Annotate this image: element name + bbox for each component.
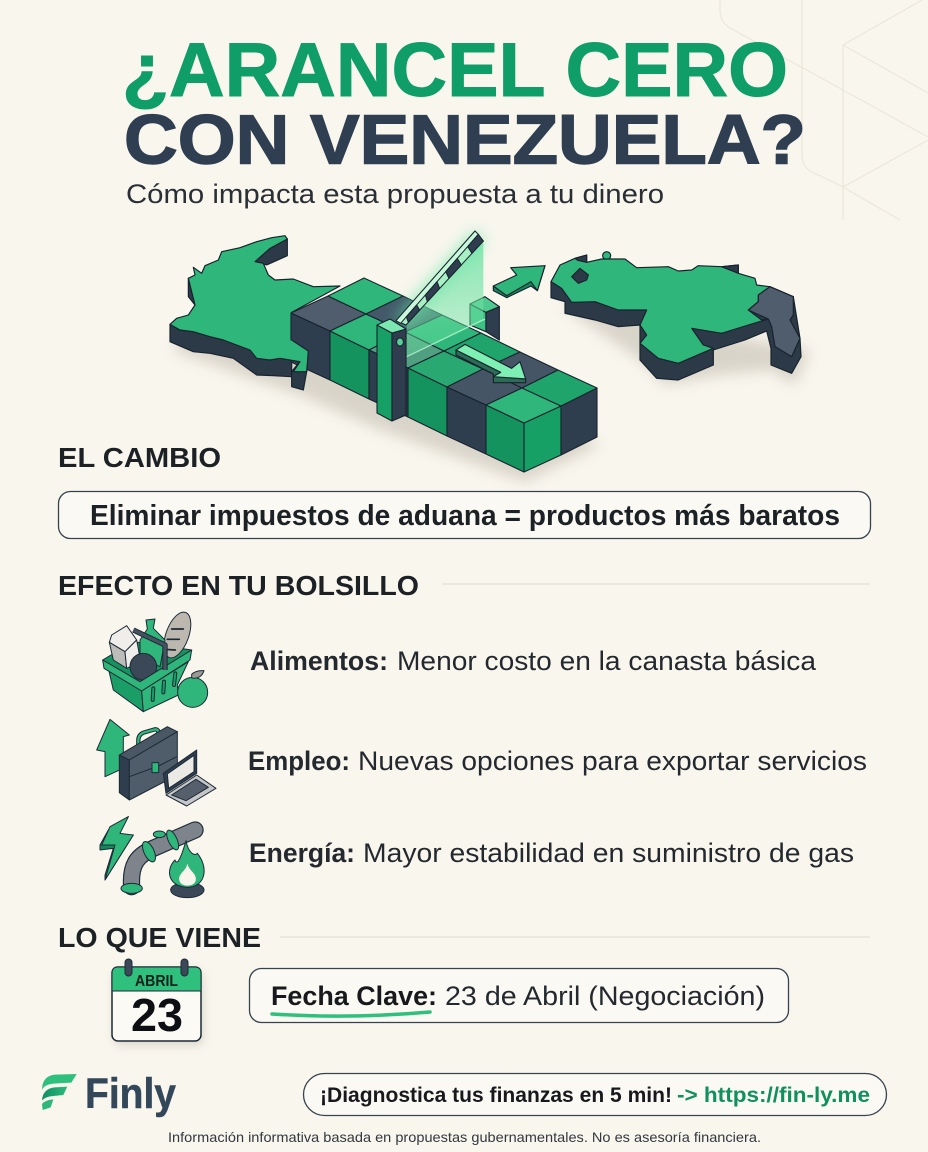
barrier: light beam	[407, 232, 485, 357]
call to action pill: ¡Diagnostica tus finanzas en 5 min!	[320, 1084, 672, 1107]
icon: energy	[100, 817, 204, 898]
arrow: on top of cargo	[456, 344, 526, 383]
cargo blocks: top faces	[291, 278, 597, 423]
text: Empleo: Nuevas opciones para exportar servicios	[358, 746, 867, 776]
heading: Efecto en tu bolsillo: EFECTO EN TU BOLSILLO	[58, 570, 419, 601]
icon: briefcase and laptop	[97, 719, 216, 806]
text: Energía: Energía:	[249, 838, 355, 868]
map: Colombia southern tip in front of blocks	[275, 340, 308, 390]
callout: fecha clave: Fecha Clave:	[271, 981, 437, 1011]
icon: calendar	[112, 959, 203, 1045]
map: Colombia	[170, 236, 340, 377]
callout: el cambio: Eliminar impuestos de aduana = productos más baratos	[90, 500, 840, 532]
icon: grocery basket	[103, 609, 208, 712]
logo: Finly	[42, 1070, 176, 1118]
title: ¿ARANCEL CERO	[122, 28, 788, 113]
title	[122, 28, 806, 178]
text: Energía: Mayor estabilidad en suministro de gas	[363, 838, 854, 868]
callout: el cambio	[58, 492, 870, 538]
barrier: striped arm	[396, 231, 483, 325]
barrier: right post	[470, 297, 499, 340]
disclaimer: Información informativa basada en propuestas gubernamentales. No es asesoría financiera.	[168, 1129, 761, 1145]
callout: fecha clave: 23 de Abril (Negociación)	[445, 981, 765, 1011]
subtitle: Cómo impacta esta propuesta a tu dinero	[126, 179, 664, 209]
callout: fecha clave	[250, 968, 788, 1022]
map: Venezuela	[551, 252, 801, 380]
barrier: arm glow	[396, 232, 484, 325]
call to action pill: -> https://fin-ly.me	[677, 1084, 870, 1107]
text: Alimentos: Alimentos:	[250, 646, 388, 676]
cargo blocks: front and side faces	[291, 313, 597, 472]
call to action pill	[304, 1074, 886, 1116]
text: Alimentos: Menor costo en la canasta básica	[397, 646, 817, 676]
icon: calendar: 23	[131, 989, 183, 1041]
heading: Lo que viene: LO QUE VIENE	[58, 922, 261, 953]
illustration: customs barrier between Colombia and Venezuela	[170, 231, 810, 482]
text: Empleo: Empleo:	[248, 746, 350, 776]
heading: El cambio: EL CAMBIO	[58, 442, 221, 473]
title: CON VENEZUELA?	[124, 100, 806, 178]
barrier: main post	[377, 319, 406, 421]
icon: calendar: ABRIL	[135, 973, 178, 990]
arrow: towards Venezuela	[493, 266, 545, 298]
soft ground shadows	[172, 300, 810, 482]
logo: Finly: Finly	[85, 1070, 176, 1118]
